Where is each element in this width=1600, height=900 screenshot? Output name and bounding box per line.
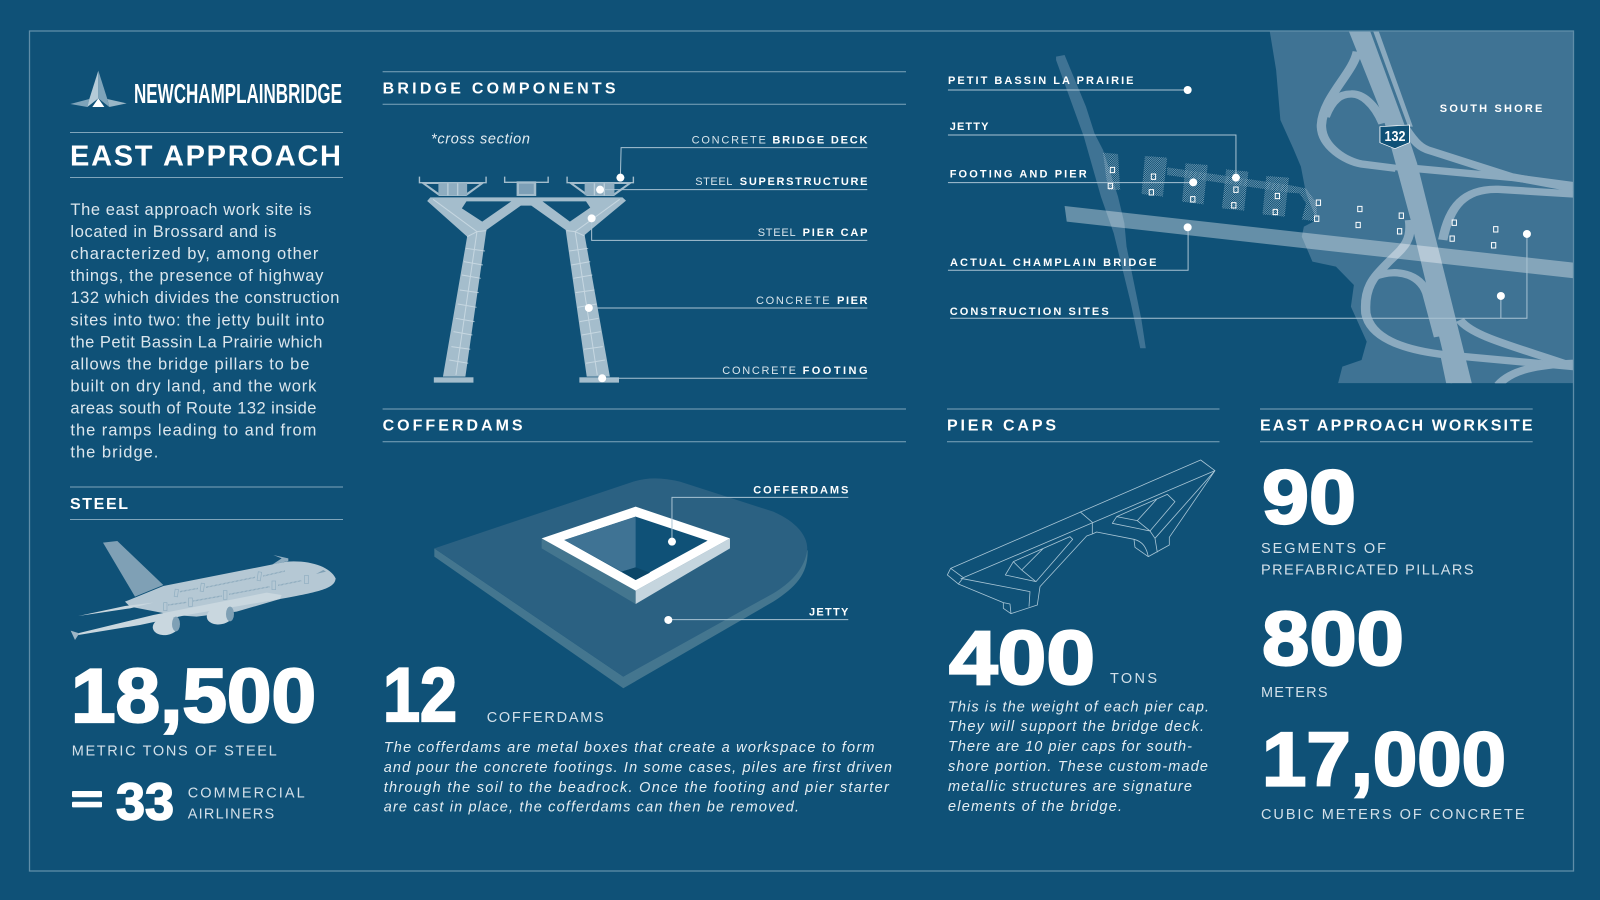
- superstructures: [419, 177, 633, 196]
- note: cross section: *cross section: [431, 131, 530, 147]
- map label: jetty: JETTY: [950, 121, 989, 133]
- piers and pier cap: [427, 197, 626, 377]
- intro text block: [70, 201, 339, 462]
- label: concrete footing: [722, 365, 868, 377]
- stat label: commercial airliners: AIRLINERS: [188, 806, 274, 822]
- intro text block: areas south of Route 132 inside: [70, 400, 316, 418]
- panel: cofferdams: [383, 409, 906, 816]
- heading: pier caps: PIER CAPS: [947, 418, 1056, 435]
- title: EAST APPROACH: [70, 140, 341, 172]
- stat: 800: 800: [1262, 597, 1404, 682]
- pier grid lines: [433, 199, 620, 375]
- shield number: 132: [1384, 128, 1406, 145]
- label: concrete footing: CONCRETE: [722, 365, 796, 377]
- map: bridge site: [948, 31, 1574, 385]
- map land: south shore: [1270, 31, 1574, 383]
- label: cofferdams: COFFERDAMS: [753, 484, 848, 496]
- stat: 17,000: 17,000: [1262, 718, 1506, 803]
- label: concrete bridge deck: [692, 134, 867, 146]
- label: concrete footing: FOOTING: [803, 365, 868, 377]
- callout dots: [585, 174, 624, 382]
- label: steel superstructure: STEEL: [695, 176, 732, 188]
- label: steel pier cap: STEEL: [758, 227, 796, 239]
- map: ramps: [1321, 52, 1574, 385]
- diagram: bridge cross section: [419, 148, 867, 383]
- footings: [434, 377, 473, 383]
- intro text block: the Petit Bassin La Prairie which: [70, 333, 322, 351]
- label: steel pier cap: [758, 227, 868, 239]
- map label: south shore: SOUTH SHORE: [1440, 103, 1542, 115]
- label: concrete pier: PIER: [837, 295, 868, 307]
- logo: [70, 71, 342, 109]
- stat label: cubic meters of concrete: CUBIC METERS OF CONCRETE: [1261, 807, 1525, 823]
- heading: east approach worksite: EAST APPROACH WORKSITE: [1260, 418, 1533, 435]
- stat label: meters: METERS: [1261, 685, 1328, 701]
- panel: steel: [70, 487, 343, 831]
- map label: actual Champlain Bridge: ACTUAL CHAMPLAIN BRIDGE: [950, 257, 1156, 269]
- panel: east approach worksite: [1260, 409, 1533, 823]
- label: concrete bridge deck: CONCRETE: [692, 134, 766, 146]
- stat label: commercial airliners: [188, 785, 305, 822]
- intro text block: allows the bridge pillars to be: [70, 355, 309, 373]
- panel: pier caps: [947, 409, 1220, 815]
- intro text block: the ramps leading to and from: [70, 422, 316, 440]
- jetty slab: [434, 548, 808, 688]
- label: concrete bridge deck: BRIDGE DECK: [772, 134, 867, 146]
- stat label: segments of prefabricated pillars: SEGMENTS OF: [1261, 541, 1386, 557]
- icon: airliner: [71, 541, 336, 640]
- stat label: segments of prefabricated pillars: PREFABRICATED PILLARS: [1261, 562, 1474, 578]
- cofferdams description: [384, 740, 892, 816]
- map: petit bassin strip: [1056, 55, 1146, 348]
- label: steel superstructure: SUPERSTRUCTURE: [740, 176, 868, 188]
- stat: 33: 33: [116, 773, 174, 831]
- pier caps description: shore portion. These custom-made: [948, 759, 1208, 775]
- map: leader lines: [948, 90, 1527, 318]
- stat: 18,500: 18,500: [71, 654, 316, 739]
- diagram: jetty with cofferdam: [434, 478, 848, 688]
- pier caps description: There are 10 pier caps for south-: [948, 739, 1192, 755]
- cofferdam box: [542, 507, 730, 604]
- intro text block: things, the presence of highway: [70, 267, 324, 285]
- heading: bridge components: BRIDGE COMPONENTS: [383, 80, 616, 97]
- heading: steel: STEEL: [70, 496, 128, 513]
- cofferdams description: through the soil to the beadrock. Once the footing and pier starter: [384, 780, 890, 796]
- map: construction sites: [1108, 167, 1498, 248]
- map: highway 132: [1349, 31, 1472, 383]
- label: concrete pier: [756, 295, 868, 307]
- icon: highway 132 shield: [1380, 125, 1409, 149]
- pier caps description: They will support the bridge deck.: [948, 719, 1204, 735]
- map: marker dots: [1184, 86, 1531, 300]
- intro text block: sites into two: the jetty built into: [70, 311, 324, 329]
- stat: 400: 400: [949, 616, 1095, 701]
- intro text block: characterized by, among other: [70, 245, 319, 263]
- map label: footing and pier: FOOTING AND PIER: [950, 168, 1087, 180]
- cofferdams description: are cast in place, the cofferdams can then be removed.: [384, 800, 799, 816]
- heading: cofferdams: COFFERDAMS: [383, 418, 523, 435]
- stat label: cofferdams: COFFERDAMS: [487, 710, 604, 726]
- label: jetty: JETTY: [809, 606, 849, 618]
- stat: 12: 12: [383, 653, 457, 738]
- logo wordmark: NEWCHAMPLAINBRIDGE: [134, 78, 342, 109]
- map label: Petit Bassin La Prairie: PETIT BASSIN LA PRAIRIE: [948, 75, 1134, 87]
- map label: construction sites: CONSTRUCTION SITES: [950, 306, 1109, 318]
- callout lines: [668, 497, 848, 620]
- diagram: pier cap wireframe: [947, 460, 1215, 614]
- pier caps description: metallic structures are signature: [948, 779, 1192, 795]
- intro text block: 132 which divides the construction: [70, 289, 339, 307]
- panel: east approach intro: [70, 71, 343, 462]
- label: concrete pier: CONCRETE: [756, 295, 830, 307]
- cofferdams description: and pour the concrete footings. In some cases, piles are first driven: [384, 760, 892, 776]
- panel: bridge components: [383, 72, 906, 383]
- pier caps description: This is the weight of each pier cap.: [948, 700, 1209, 716]
- pier caps description: [948, 700, 1209, 815]
- intro text block: located in Brossard and is: [70, 223, 276, 241]
- intro text block: the bridge.: [70, 444, 158, 462]
- stat label: metric tons of steel: METRIC TONS OF STEEL: [72, 744, 277, 760]
- callout dots: [664, 538, 676, 624]
- stat label: segments of prefabricated pillars: [1261, 541, 1474, 578]
- stat label: commercial airliners: COMMERCIAL: [188, 785, 305, 801]
- label: steel pier cap: PIER CAP: [803, 227, 868, 239]
- pier caps description: elements of the bridge.: [948, 799, 1122, 815]
- intro text block: The east approach work site is: [70, 201, 311, 219]
- cofferdams description: The cofferdams are metal boxes that create a workspace to form: [384, 740, 874, 756]
- stat: 90: 90: [1262, 456, 1356, 540]
- stat label: tons: TONS: [1110, 671, 1157, 687]
- icon: equals sign: [72, 791, 102, 807]
- map: actual Champlain bridge: [1065, 206, 1574, 278]
- map: jetty hatching: [1103, 153, 1317, 222]
- callout lines: [589, 148, 867, 378]
- icon: bridge star: [70, 71, 127, 107]
- intro text block: built on dry land, and the work: [70, 377, 317, 395]
